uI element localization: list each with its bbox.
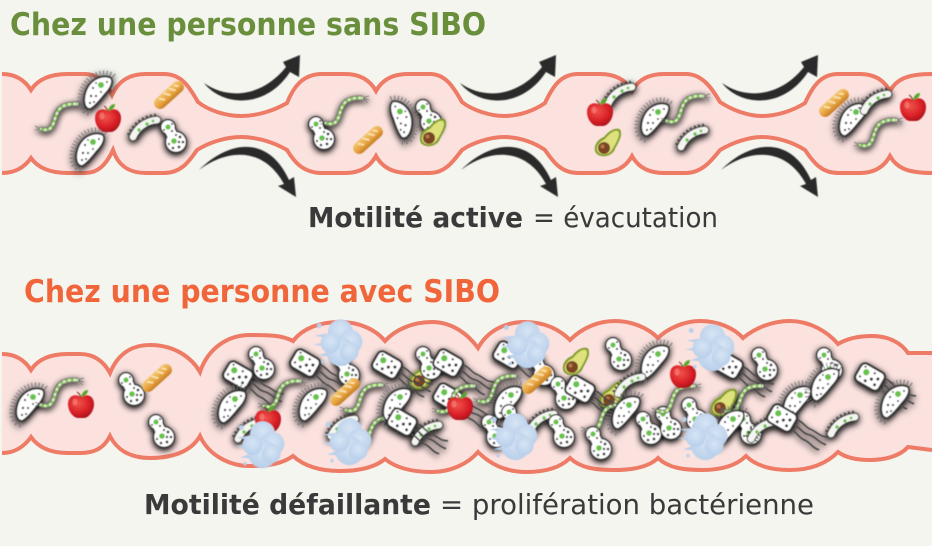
bacteria overgrowth xyxy=(15,337,920,460)
intestine wall bottom xyxy=(2,137,932,173)
food and gas clouds xyxy=(68,319,734,468)
food without SIBO xyxy=(95,78,926,157)
title: without SIBO: Chez une personne sans SIBO xyxy=(10,7,486,43)
intestine wall bottom xyxy=(2,436,932,472)
caption: active motility: = évacutation xyxy=(533,202,718,234)
caption: failing motility: Motilité défaillante xyxy=(144,489,431,521)
arrows: peristaltic motion xyxy=(199,55,818,197)
bacteria without SIBO xyxy=(35,76,903,167)
intestine tube with SIBO xyxy=(2,321,932,472)
intestine wall top xyxy=(2,321,932,373)
title: with SIBO: Chez une personne avec SIBO xyxy=(24,274,500,310)
panel: SIBO intestine xyxy=(2,319,932,472)
caption: active motility: Motilité active xyxy=(308,202,523,234)
panel: healthy intestine xyxy=(2,55,932,197)
caption: failing motility: = prolifération bactérienne xyxy=(440,489,814,521)
intestine wall top xyxy=(2,74,932,116)
intestine tube without SIBO xyxy=(2,74,932,173)
